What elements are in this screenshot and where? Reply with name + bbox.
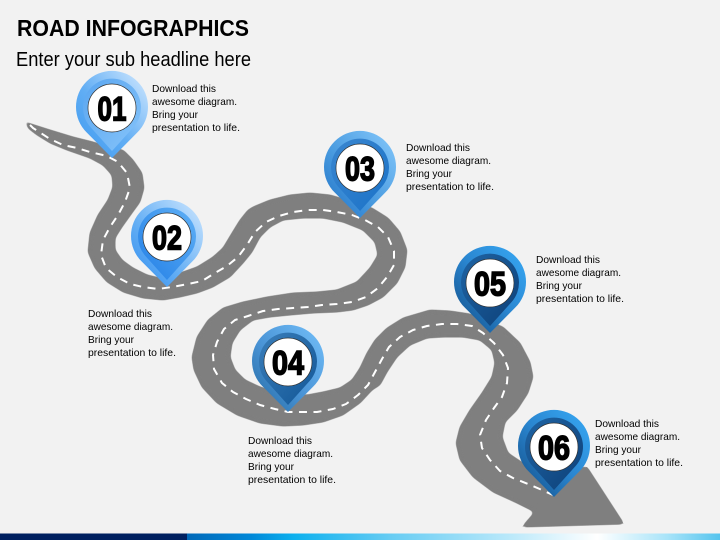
- title: ROAD INFOGRAPHICS: [17, 15, 249, 41]
- pin 05: 05: [474, 266, 506, 304]
- text block 03: Bring your: [406, 168, 452, 180]
- text block 05: [536, 254, 624, 305]
- text block 05: presentation to life.: [536, 293, 624, 305]
- text block 04: Download this: [248, 435, 312, 447]
- text block 01: Bring your: [152, 109, 198, 121]
- text block 01: presentation to life.: [152, 122, 240, 134]
- pin 01: [76, 71, 148, 158]
- pin 03: [324, 131, 396, 218]
- arrowhead: [522, 467, 624, 526]
- text block 01: [152, 83, 240, 134]
- text block 05: awesome diagram.: [536, 267, 621, 279]
- text block 04: presentation to life.: [248, 474, 336, 486]
- pin 02: [131, 200, 203, 287]
- text block 05: Bring your: [536, 280, 582, 292]
- text block 06: [595, 418, 683, 469]
- pin 03: 03: [345, 150, 375, 188]
- pin 02: 02: [152, 220, 182, 258]
- text block 02: Bring your: [88, 334, 134, 346]
- text block 03: [406, 142, 494, 193]
- text block 03: Download this: [406, 142, 470, 154]
- text block 04: [248, 435, 336, 486]
- text block 03: awesome diagram.: [406, 155, 491, 167]
- text block 05: Download this: [536, 254, 600, 266]
- text block 04: Bring your: [248, 461, 294, 473]
- text block 02: presentation to life.: [88, 347, 176, 359]
- pin 01: 01: [98, 90, 126, 128]
- winding road: [25, 120, 624, 527]
- road centre dashes: [30, 125, 553, 495]
- text block 02: Download this: [88, 308, 152, 320]
- subtitle: Enter your sub headline here: [16, 49, 251, 71]
- pin 06: [518, 410, 590, 497]
- pin 06: 06: [538, 430, 570, 468]
- footer bar: [0, 534, 720, 540]
- pin 04: [252, 325, 324, 412]
- pin 05: [454, 246, 526, 333]
- text block 04: awesome diagram.: [248, 448, 333, 460]
- text block 02: [88, 308, 176, 359]
- text block 01: Download this: [152, 83, 216, 95]
- text block 06: Bring your: [595, 444, 641, 456]
- text block 03: presentation to life.: [406, 181, 494, 193]
- road surface: [25, 120, 624, 527]
- text block 01: awesome diagram.: [152, 96, 237, 108]
- pin 04: 04: [272, 344, 304, 382]
- text block 06: awesome diagram.: [595, 431, 680, 443]
- text block 06: presentation to life.: [595, 457, 683, 469]
- text block 02: awesome diagram.: [88, 321, 173, 333]
- text block 06: Download this: [595, 418, 659, 430]
